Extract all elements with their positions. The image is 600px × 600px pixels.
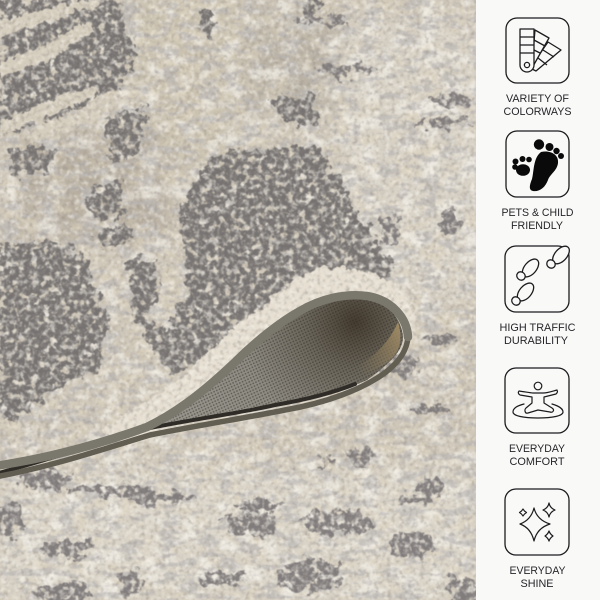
cream streaks across top-left gray [0,0,115,142]
icon: sparkles [505,489,569,555]
icon: meditating figure [505,368,569,433]
small gray flecks [0,14,477,600]
label: everyday shine: EVERYDAY [510,565,566,577]
label: high traffic durability: HIGH TRAFFIC [500,322,576,334]
label: variety of colorways [504,93,572,118]
icon: color fan deck [506,18,569,83]
label: pets and child friendly: FRIENDLY [511,220,564,232]
panel: feature sidebar [476,0,600,600]
label: everyday shine [510,565,566,590]
label: everyday shine: SHINE [520,578,554,590]
gray pattern patches [0,0,400,425]
label: high traffic durability [500,322,576,347]
label: variety of colorways: COLORWAYS [504,106,572,118]
label: everyday comfort: COMFORT [510,456,565,468]
label: pets and child friendly [502,207,574,232]
label: variety of colorways: VARIETY OF [506,93,569,105]
feature: everyday comfort [505,368,569,468]
rolled rug edge and binding [0,295,408,477]
tan blotches [6,1,452,452]
upper binding band [0,295,408,466]
woven backing [150,298,403,428]
feature: pets and child friendly [502,131,574,232]
icon: footsteps [505,243,572,312]
icon: paw and foot [506,131,569,197]
pile grain [0,0,476,600]
mottled gray streaks [0,0,476,600]
feature: everyday shine [505,489,569,590]
label: everyday comfort [509,443,566,468]
label: everyday comfort: EVERYDAY [509,443,566,455]
feature: variety of colorways [504,18,572,118]
dark shadow under the lip [0,384,355,474]
cream pile rim at the fold [100,268,416,445]
label: high traffic durability: DURABILITY [504,335,569,347]
lower binding band [0,337,408,477]
white blotches [0,0,476,600]
label: pets and child friendly: PETS & CHILD [502,207,574,219]
feature: high traffic durability [500,243,576,347]
